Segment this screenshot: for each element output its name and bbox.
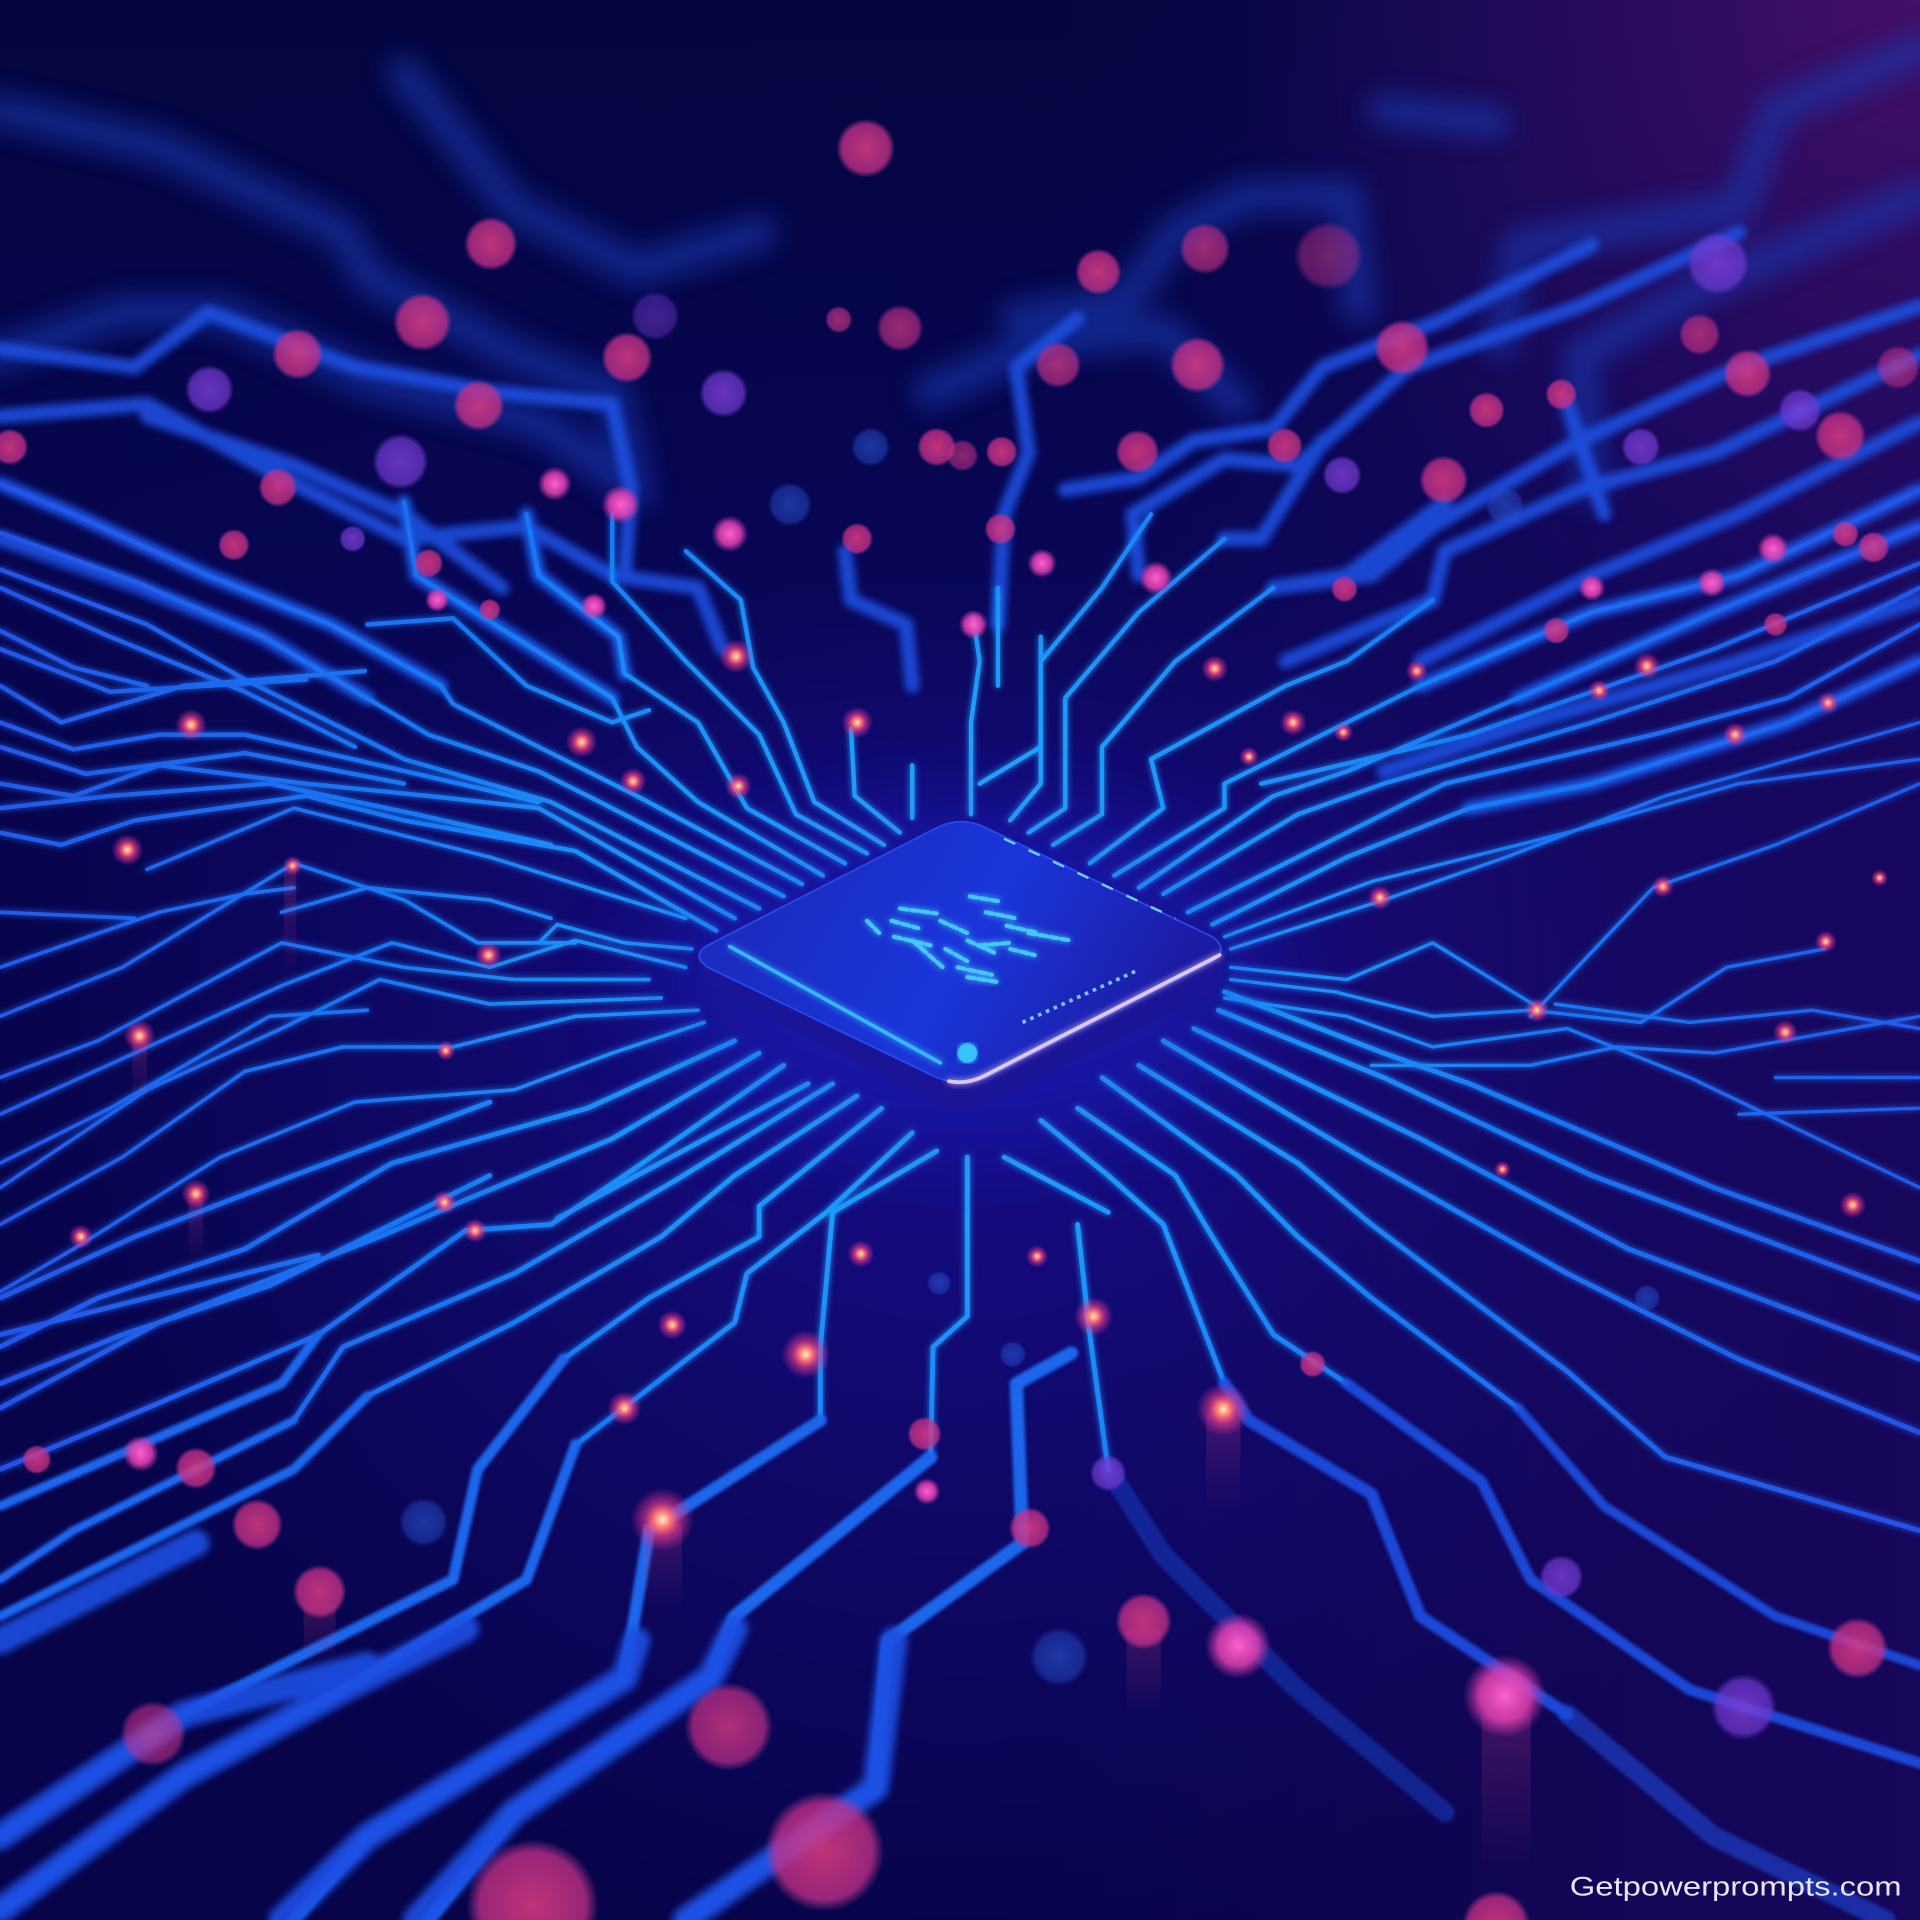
traces: right side — [1224, 722, 1920, 1188]
traces: lower left fan — [0, 1041, 1108, 1616]
chip side walls — [698, 943, 1224, 1111]
traces: left side — [0, 808, 704, 1292]
chip edge highlight: left — [730, 947, 940, 1063]
watermark: Getpowerprompts.com — [1570, 1872, 1902, 1902]
chip corner dot — [958, 1043, 977, 1063]
blurred foreground traces, lower left — [0, 1543, 894, 1920]
chip top face — [699, 822, 1221, 1082]
bokeh lights, foreground — [120, 1271, 1888, 1920]
thick near-foreground traces, lower left — [0, 1335, 1071, 1920]
traces: upper left fan — [0, 484, 980, 931]
far blurred traces at top — [0, 49, 1920, 490]
traces: lower right fan — [1041, 992, 1920, 1531]
vertical light reflections — [132, 869, 1531, 1873]
glowing points, middle and lower field — [22, 610, 1888, 1551]
microchip — [655, 814, 1267, 1145]
chip surface markings — [867, 896, 1070, 982]
traces: upper right fan — [980, 490, 1920, 924]
chip top edge marks — [1004, 839, 1176, 918]
chip edge highlight: right — [949, 955, 1220, 1082]
thick foreground traces, lower right — [1108, 1384, 1920, 1920]
chip shadow glow — [655, 814, 1267, 1145]
mid-distance upper traces — [0, 233, 1920, 808]
chip dotted row — [1022, 970, 1139, 1022]
bokeh lights, upper field — [0, 119, 1920, 644]
